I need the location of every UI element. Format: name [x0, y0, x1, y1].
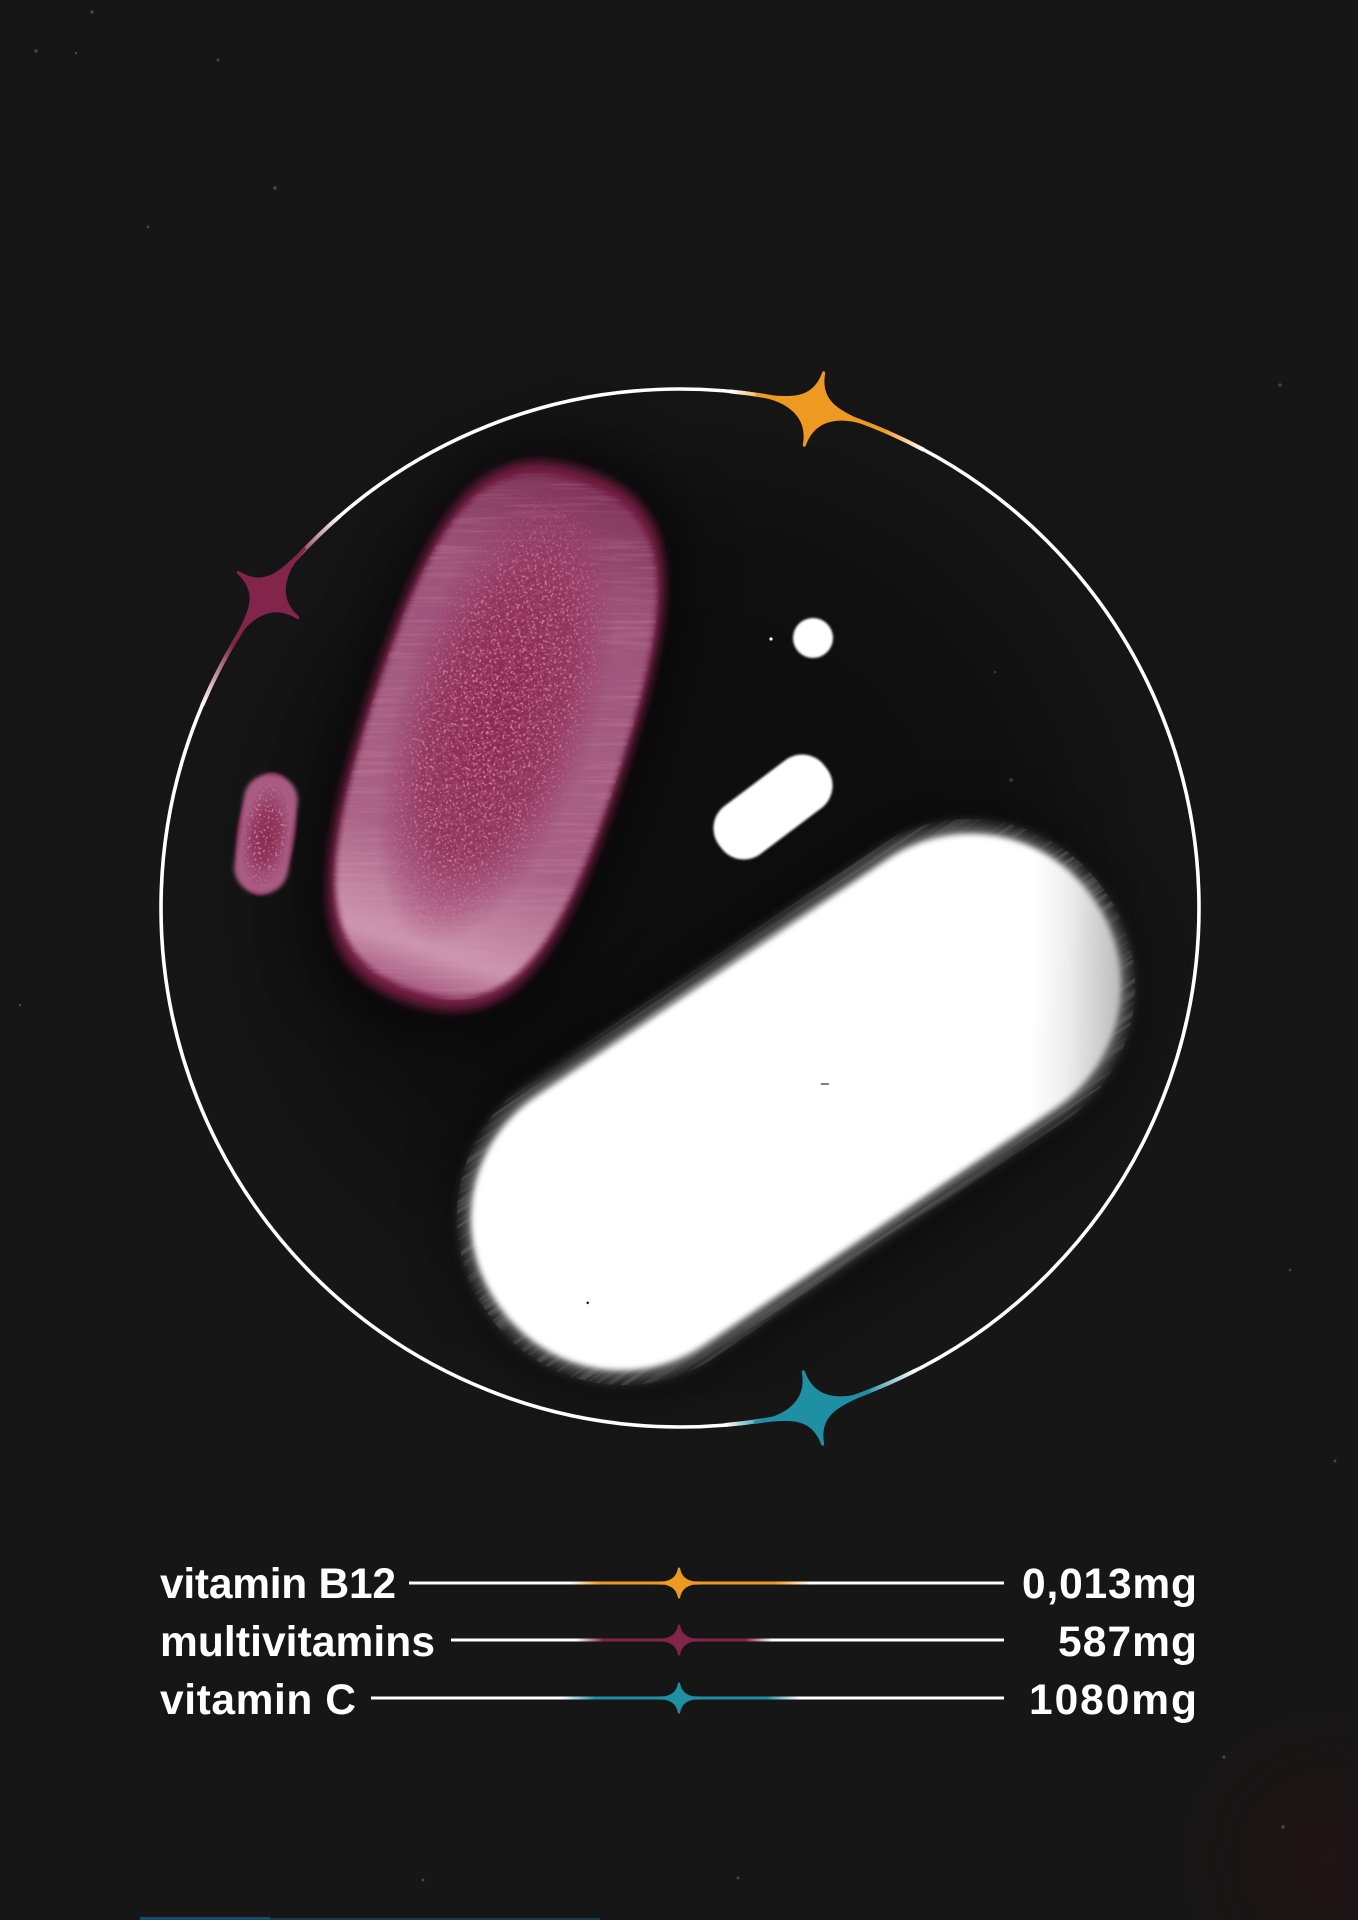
- pill: vitamin B12 capsule (white): [702, 743, 844, 871]
- legend row: multivitamins: 587mg: [1058, 1619, 1197, 1666]
- legend: [160, 1561, 1197, 1724]
- star marker: multivitamins (magenta) on ring: [201, 516, 340, 705]
- legend row: multivitamins: [160, 1619, 1197, 1666]
- enclosing circle ring: [161, 389, 1199, 1427]
- legend row: vitamin C: [160, 1677, 1197, 1724]
- pill: vitamin B12 dot (white): [769, 618, 833, 658]
- pill: multivitamins large (magenta): [320, 454, 672, 1018]
- legend row: vitamin C: 1080mg: [1029, 1677, 1197, 1724]
- legend row: vitamin B12: vitamin B12: [160, 1561, 396, 1608]
- legend row: vitamin C: vitamin C: [160, 1677, 356, 1724]
- dark halos around pills: [263, 400, 1203, 1454]
- legend row: vitamin B12: [160, 1561, 1197, 1608]
- pill: vitamin C large (white): [393, 755, 1199, 1449]
- star marker: vitamin B12 (orange) on ring: [730, 356, 924, 462]
- star marker: vitamin C (teal) on ring: [725, 1355, 916, 1461]
- legend row: multivitamins: multivitamins: [160, 1619, 435, 1666]
- pill: multivitamins small (magenta): [229, 769, 303, 899]
- legend row: vitamin B12: 0,013mg: [1022, 1561, 1197, 1608]
